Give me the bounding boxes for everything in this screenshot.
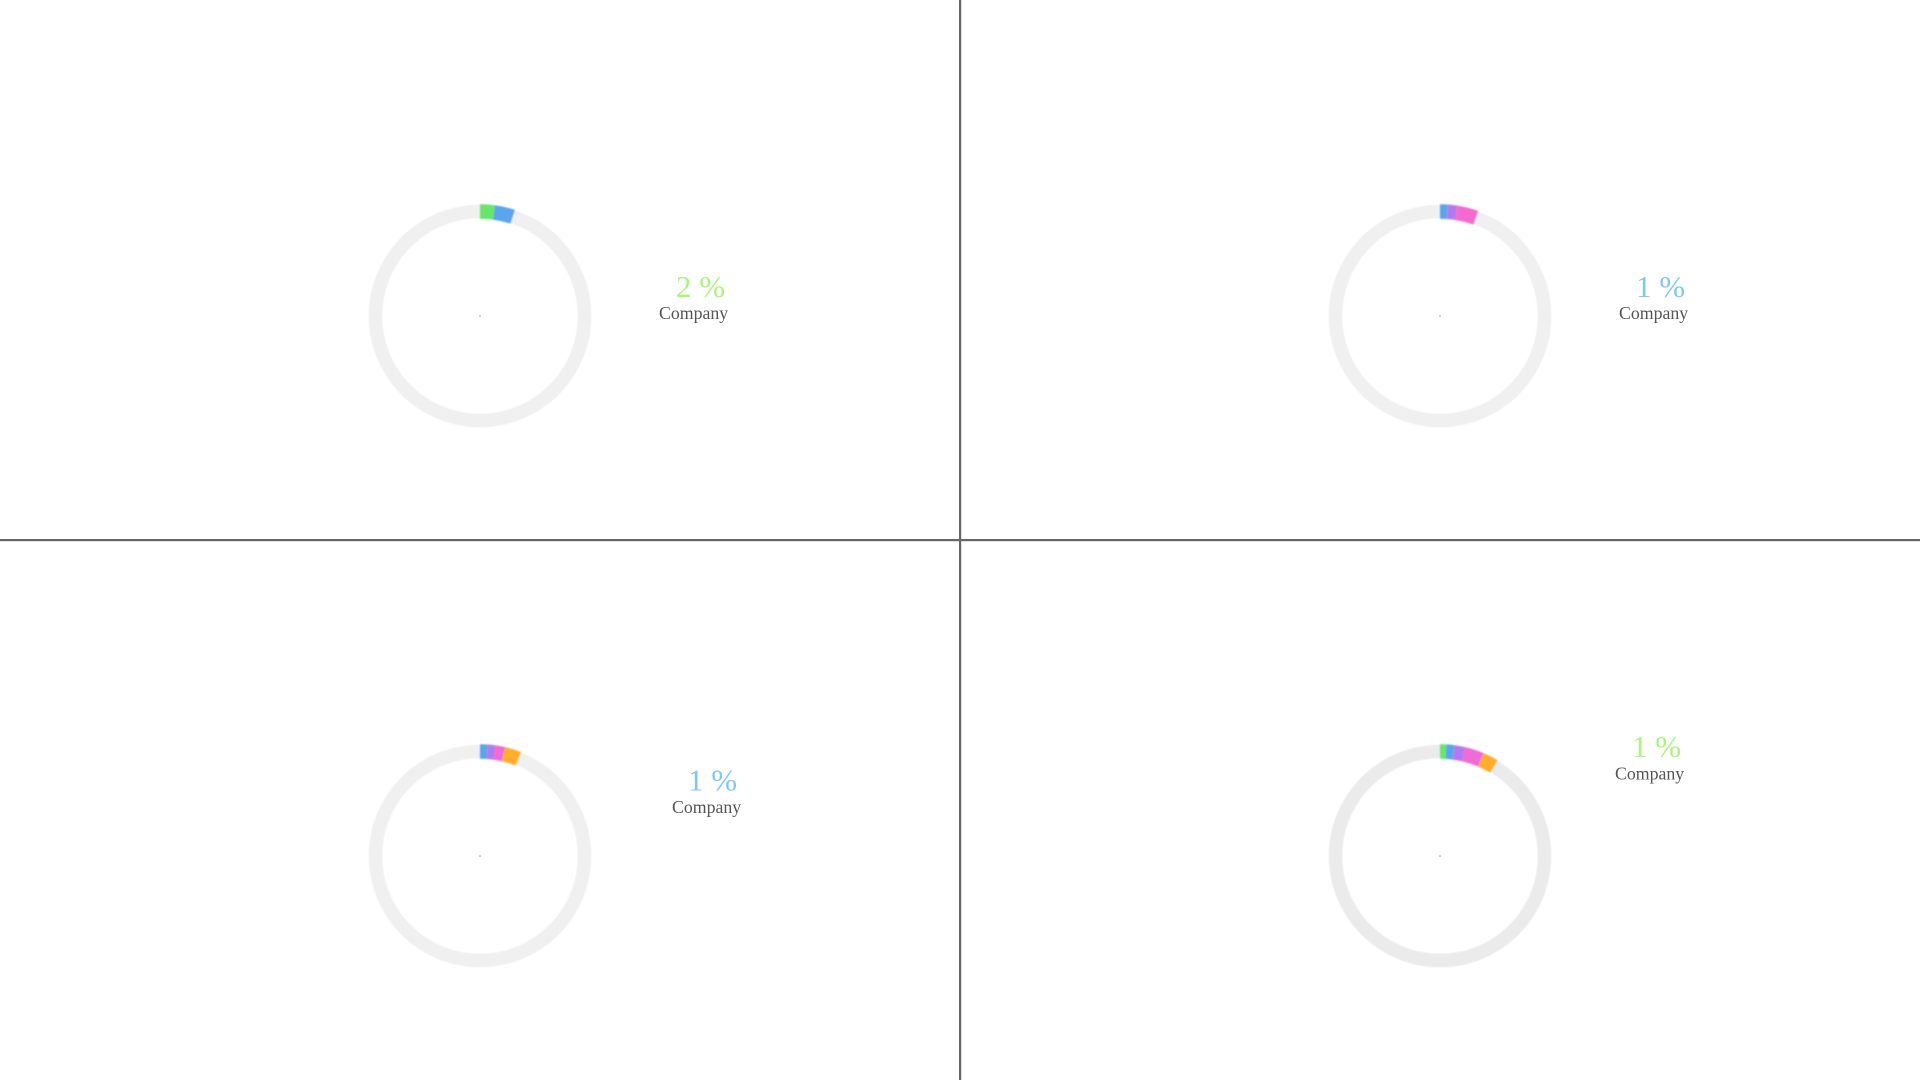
donut chart: top left (376, 212, 584, 420)
label: 1 % Company (1615, 729, 1684, 784)
panel: top left (376, 212, 728, 420)
label: 1 % Company (672, 762, 741, 817)
label: 2 % Company (659, 269, 728, 323)
donut chart: top right (1336, 212, 1544, 420)
label: 1 % Company: Company (1619, 303, 1688, 323)
label: 1 % Company: 1 % (1632, 729, 1681, 764)
donut chart: bottom left (376, 752, 584, 960)
label: 1 % Company: Company (672, 797, 741, 817)
label: 1 % Company: 1 % (688, 762, 737, 798)
panel: bottom left (376, 752, 741, 960)
label: 2 % Company: Company (659, 303, 728, 323)
label: 1 % Company (1619, 269, 1688, 323)
panel: top right (1336, 212, 1688, 420)
label: 1 % Company: 1 % (1636, 269, 1685, 304)
label: 2 % Company: 2 % (676, 269, 725, 304)
donut chart: bottom right (1336, 752, 1544, 960)
label: 1 % Company: Company (1615, 764, 1684, 784)
panel: bottom right (1336, 729, 1684, 960)
